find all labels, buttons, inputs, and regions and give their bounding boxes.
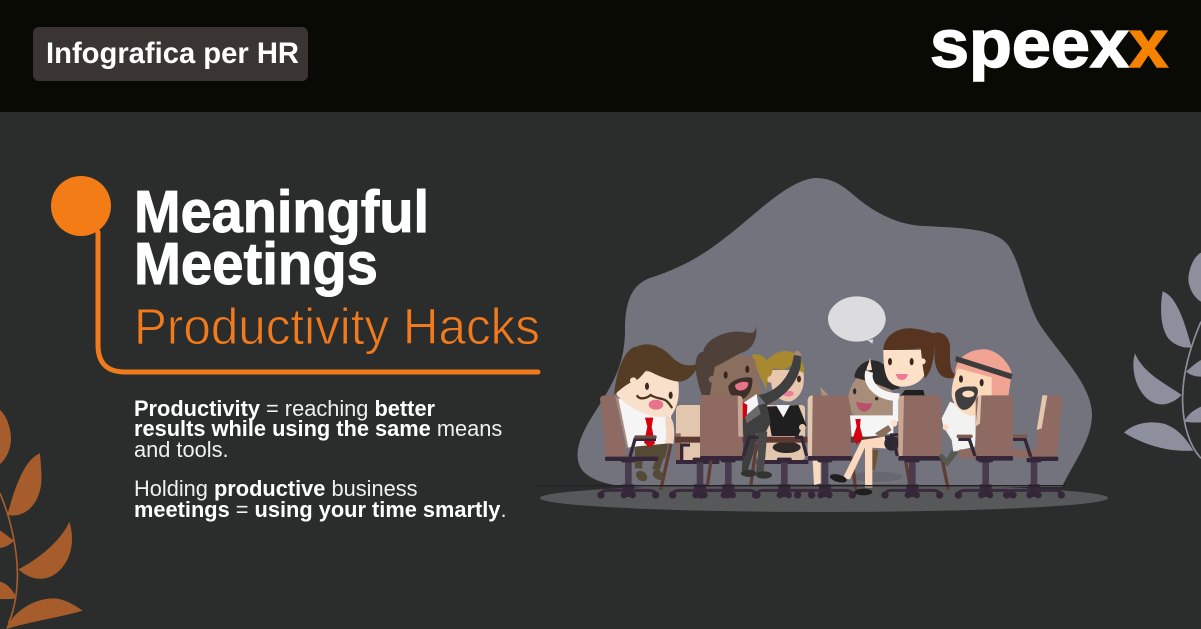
front chair 5 — [955, 395, 1017, 499]
front chair 4 — [881, 395, 943, 499]
header bar — [0, 0, 1201, 112]
illustration: meeting table scene — [597, 296, 1065, 499]
text block: productivity definition: and tools. — [134, 437, 229, 462]
speech bubble — [828, 296, 886, 344]
right part of the scene — [829, 328, 1065, 499]
person: man with keffiyeh — [938, 349, 1013, 467]
title: Meetings — [134, 231, 378, 297]
table top — [675, 437, 928, 443]
logo: speexx: speexx — [930, 6, 1168, 82]
text block: productivity definition: Productivity = reaching better — [134, 396, 435, 421]
badge: Infografica per HR — [33, 27, 308, 81]
far side chairs — [669, 405, 815, 499]
front chair 2 — [682, 395, 759, 499]
text block: productive meetings: Holding productive business — [134, 476, 418, 501]
far right chair — [958, 395, 1065, 499]
person: blonde woman — [752, 351, 821, 485]
orange leaves, bottom left — [0, 410, 83, 629]
person: man with moustache and chair — [597, 344, 700, 499]
text block: productivity definition: results while using the same means — [134, 416, 502, 441]
badge: Infografica per HR: Infografica per HR — [46, 37, 299, 70]
person: bearded man raising hand — [696, 326, 802, 479]
table legs — [661, 443, 948, 490]
person: woman with ponytail — [867, 328, 957, 436]
title accent: circle and line — [51, 176, 538, 372]
floor shadow — [851, 472, 903, 482]
person: seated man with dark hair — [829, 360, 900, 495]
ground ellipse — [540, 484, 1108, 512]
title — [134, 179, 429, 297]
grey blob backdrop — [578, 178, 1092, 487]
grey leaves, right — [1124, 253, 1201, 458]
subtitle: Productivity Hacks — [134, 298, 540, 355]
ground line — [535, 485, 1065, 486]
front chair 3 — [794, 387, 856, 499]
text block: productive meetings: meetings = using your time smartly. — [134, 497, 506, 522]
title: Meaningful — [134, 179, 429, 245]
